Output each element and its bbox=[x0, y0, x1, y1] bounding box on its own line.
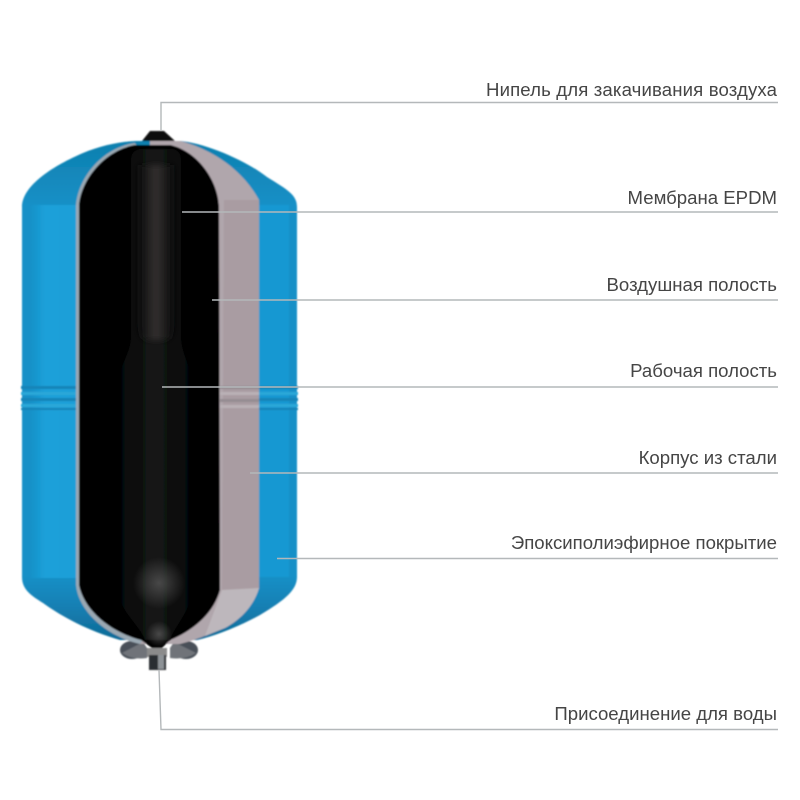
steel shell cross-section bbox=[76, 141, 259, 644]
reinforcing ribs on the tank seam bbox=[21, 386, 298, 410]
label: water connection: Присоединение для воды bbox=[554, 703, 777, 724]
black air cavity bbox=[79, 145, 220, 648]
label: air cavity: Воздушная полость bbox=[607, 274, 777, 295]
EPDM membrane bbox=[118, 149, 192, 647]
label: EPDM membrane: Мембрана EPDM bbox=[628, 187, 777, 208]
steel body: blue epoxy coating bbox=[22, 141, 297, 640]
icon: air valve nipple bbox=[142, 131, 175, 141]
leader lines bbox=[159, 102, 778, 730]
label: steel body: Корпус из стали bbox=[639, 447, 777, 468]
tank illustration bbox=[21, 131, 298, 670]
label: air valve: Нипель для закачивания воздуха bbox=[486, 79, 778, 100]
label: epoxy coating: Эпоксиполиэфирное покрытие bbox=[511, 532, 777, 553]
label: working cavity: Рабочая полость bbox=[630, 360, 777, 381]
icon: water connection fitting bbox=[120, 641, 198, 670]
